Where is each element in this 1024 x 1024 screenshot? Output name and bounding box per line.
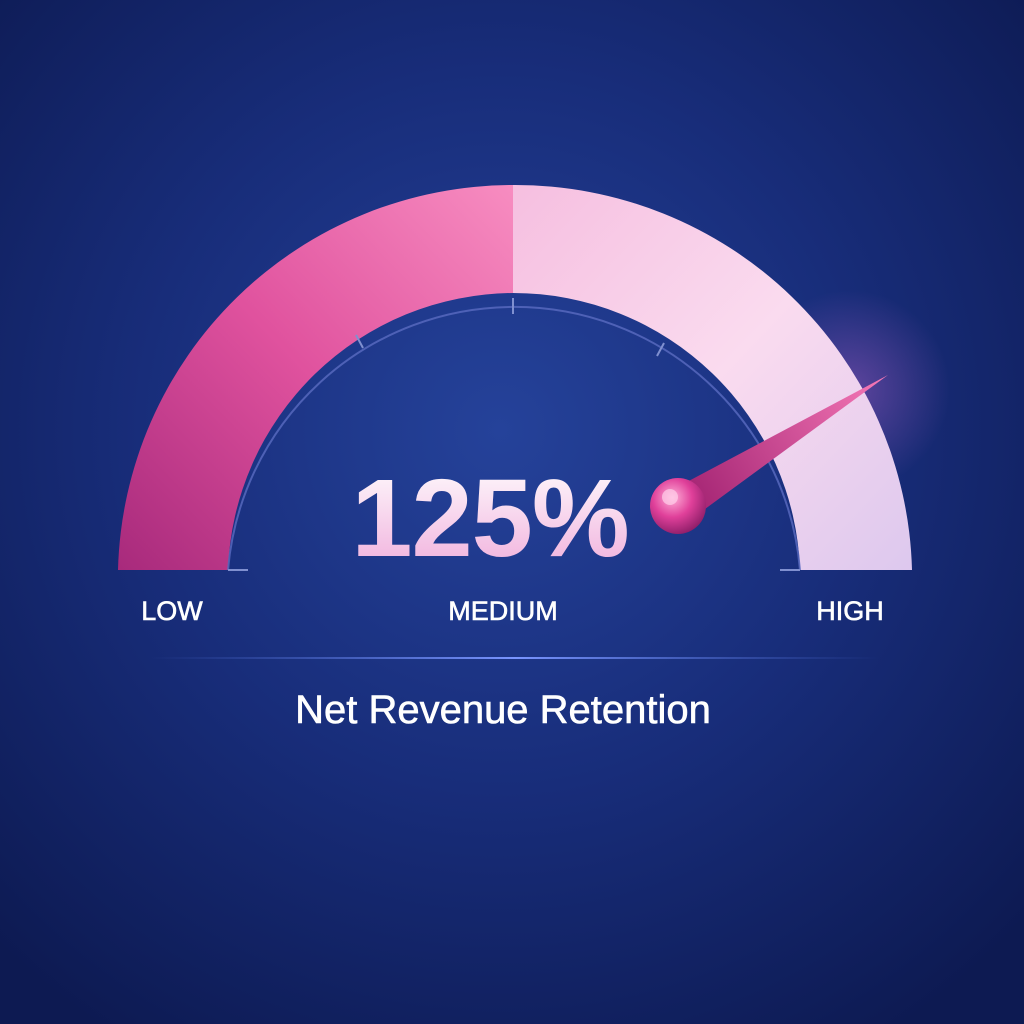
- needle: [650, 375, 888, 534]
- label: medium: MEDIUM: [448, 596, 558, 626]
- needle hub: [650, 478, 706, 534]
- label: low: LOW: [141, 596, 203, 626]
- inner arc line: [228, 307, 800, 570]
- title: Net Revenue Retention: [295, 688, 711, 732]
- value: 125%: 125%: [351, 457, 629, 580]
- arc segment: low-medium (left): [118, 185, 513, 570]
- arc segment: medium-high (right): [513, 185, 912, 570]
- label: high: HIGH: [816, 596, 884, 626]
- gauge arc: [118, 185, 912, 570]
- ticks: [228, 298, 800, 570]
